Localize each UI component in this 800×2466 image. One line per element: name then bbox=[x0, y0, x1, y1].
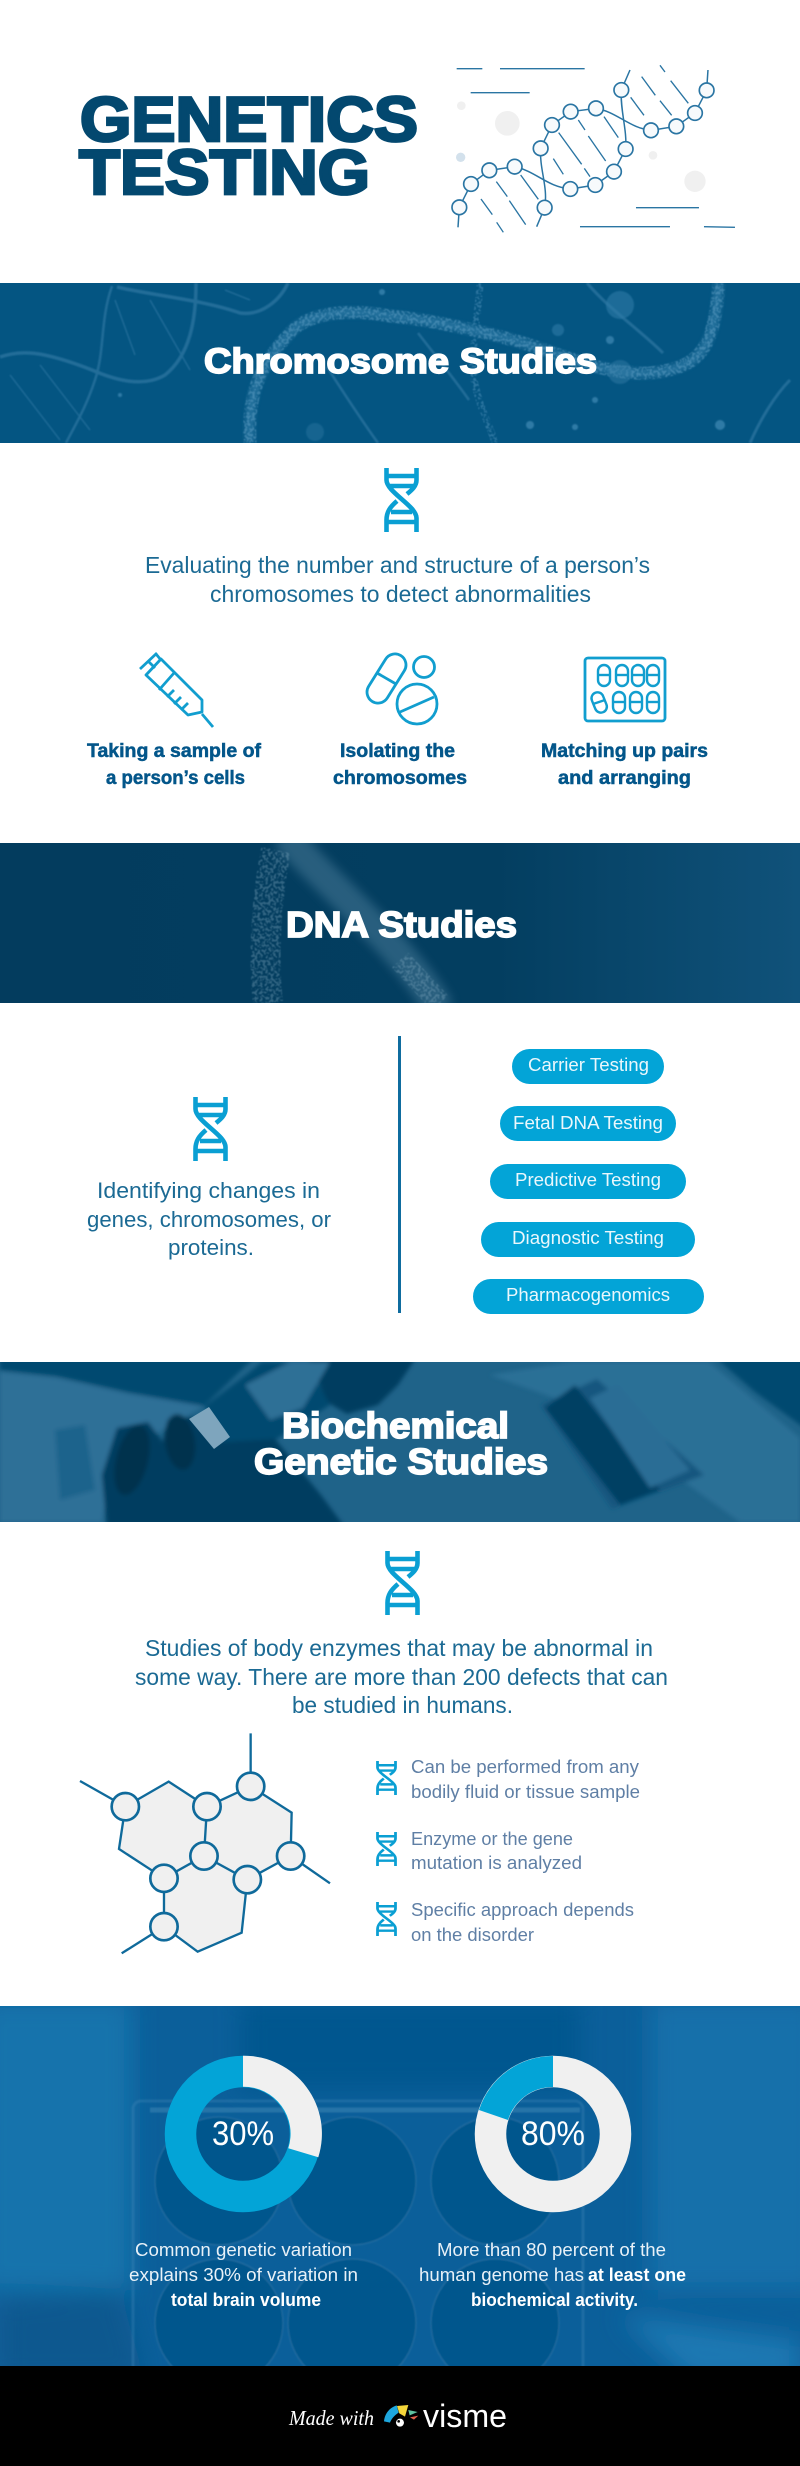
wordmark: visme bbox=[423, 2398, 507, 2434]
text block: DNA description bbox=[87, 1178, 331, 1260]
text block: DNA description: Identifying changes in bbox=[97, 1178, 320, 1203]
caption: brain volume: total brain volume bbox=[171, 2289, 321, 2310]
background dots bbox=[456, 101, 706, 192]
donut chart: 30% bbox=[180, 2056, 322, 2196]
icon: DNA bbox=[386, 468, 416, 532]
text block: biochemical description: Studies of body enzymes that may be abnormal in bbox=[145, 1635, 653, 1661]
step labels: and arranging bbox=[558, 768, 691, 789]
pill: Fetal DNA Testing bbox=[500, 1106, 676, 1141]
text block: DNA description: proteins. bbox=[168, 1235, 254, 1260]
pill: Fetal DNA Testing: Fetal DNA Testing bbox=[513, 1113, 663, 1133]
illustration: DNA helix bbox=[452, 65, 735, 232]
heading: Biochemical bbox=[282, 1405, 509, 1446]
caption: human genome: human genome has bbox=[419, 2264, 584, 2285]
footer bbox=[0, 2366, 800, 2466]
text block: chromosome description: Evaluating the number and structure of a person’s bbox=[145, 552, 650, 578]
step labels: Matching up pairs bbox=[541, 741, 708, 762]
heading bbox=[254, 1410, 548, 1476]
pill: Pharmacogenomics: Pharmacogenomics bbox=[506, 1285, 670, 1305]
bullet list bbox=[378, 1757, 640, 1945]
glove bbox=[102, 1417, 347, 1530]
left lighter sheet bbox=[0, 1372, 204, 1522]
donut chart: 80% bbox=[479, 2056, 616, 2196]
step labels: a person’s cells bbox=[106, 768, 245, 789]
panel: statistics background bbox=[0, 2000, 800, 2391]
pill: Predictive Testing bbox=[490, 1164, 686, 1199]
bullet 3 bbox=[378, 1900, 634, 1945]
instrument bbox=[541, 1379, 704, 1509]
decorative dashes bbox=[457, 69, 735, 227]
text block: biochemical description bbox=[135, 1635, 668, 1718]
panel: Chromosome Studies banner bbox=[0, 283, 800, 443]
text block: biochemical description: some way. There are more than 200 defects that can bbox=[135, 1664, 668, 1690]
pill: Carrier Testing bbox=[512, 1049, 664, 1084]
step labels: chromosomes bbox=[333, 768, 467, 789]
icon: DNA bbox=[388, 1551, 418, 1615]
illustration: molecule bbox=[80, 1733, 330, 1953]
vertical divider bbox=[398, 1036, 401, 1313]
pill: Carrier Testing: Carrier Testing bbox=[528, 1055, 649, 1075]
caption: brain volume: Common genetic variation bbox=[135, 2239, 352, 2260]
icon: syringe bbox=[140, 653, 213, 727]
bullet 1: Can be performed from any bbox=[411, 1757, 639, 1777]
caption: human genome bbox=[419, 2239, 686, 2310]
caption: human genome: More than 80 percent of the bbox=[437, 2239, 666, 2260]
title bbox=[79, 85, 418, 208]
helix nodes bbox=[452, 83, 714, 215]
pill: Predictive Testing: Predictive Testing bbox=[515, 1170, 661, 1190]
logo mark bbox=[384, 2405, 418, 2427]
bullet 2: mutation is analyzed bbox=[411, 1853, 582, 1873]
bullet 1 bbox=[378, 1757, 640, 1802]
step labels: Isolating the bbox=[340, 741, 455, 762]
helix strands bbox=[458, 70, 708, 227]
base pair rungs bbox=[481, 65, 688, 232]
barcode bbox=[189, 1407, 230, 1449]
caption: human genome: biochemical activity. bbox=[471, 2289, 638, 2310]
donut chart: 30%: 30% bbox=[212, 2115, 274, 2153]
title: TESTING bbox=[79, 138, 370, 208]
pill: Diagnostic Testing bbox=[481, 1222, 695, 1257]
bullet 1: bodily fluid or tissue sample bbox=[411, 1782, 640, 1802]
icon: pills bbox=[363, 650, 437, 724]
title: GENETICS bbox=[80, 85, 418, 155]
panel: Biochemical Genetic Studies banner bbox=[0, 1362, 800, 1522]
text block: DNA description: genes, chromosomes, or bbox=[87, 1207, 331, 1232]
bullet 3: on the disorder bbox=[411, 1925, 534, 1945]
caption: brain volume: explains 30% of variation in bbox=[129, 2264, 358, 2285]
pill: Pharmacogenomics bbox=[473, 1279, 704, 1314]
caption: human genome: at least one bbox=[588, 2264, 686, 2285]
step labels bbox=[87, 741, 708, 789]
bullet 3: Specific approach depends bbox=[411, 1900, 634, 1920]
text block: chromosome description: chromosomes to detect abnormalities bbox=[210, 581, 591, 607]
made with label: Made with bbox=[288, 2406, 374, 2430]
step labels: Taking a sample of bbox=[87, 741, 262, 762]
donut chart: 80%: 80% bbox=[521, 2115, 585, 2153]
heading: DNA Studies bbox=[286, 904, 517, 945]
text block: biochemical description: be studied in humans. bbox=[292, 1692, 513, 1718]
bullet 2 bbox=[378, 1829, 582, 1873]
text block: chromosome description bbox=[145, 552, 650, 607]
top dark wedges bbox=[0, 1362, 251, 1409]
icon: blister pack bbox=[585, 658, 665, 721]
icon: DNA bbox=[196, 1097, 226, 1161]
pill list: testing types bbox=[473, 1049, 704, 1314]
bullet 2: Enzyme or the gene bbox=[411, 1829, 573, 1849]
heading: Genetic Studies bbox=[254, 1441, 548, 1482]
caption: brain volume bbox=[129, 2239, 358, 2310]
panel: DNA Studies banner bbox=[0, 835, 800, 1010]
pill: Diagnostic Testing: Diagnostic Testing bbox=[512, 1228, 664, 1248]
heading: Chromosome Studies bbox=[204, 342, 597, 381]
